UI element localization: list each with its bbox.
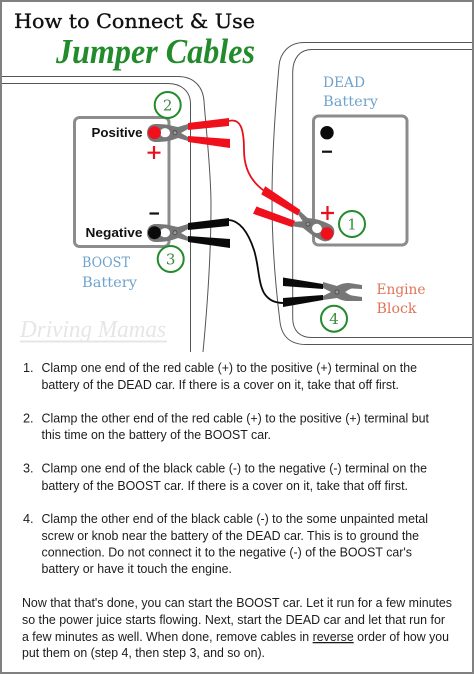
minus sign xyxy=(322,151,332,153)
step badge 4 xyxy=(321,306,347,332)
step 2 text: Clamp the other end of the red cable (+) to the positive (+) terminal but xyxy=(42,412,429,426)
step 3 text: 3. xyxy=(23,462,34,476)
step 3 text: Clamp one end of the black cable (-) to the negative (-) terminal on the xyxy=(42,462,427,476)
minus sign xyxy=(150,212,159,215)
label: boost battery: Battery xyxy=(82,275,137,291)
battery case xyxy=(314,116,407,245)
clamp 1: red on dead positive xyxy=(252,186,340,250)
heading: jumper cables: Jumper Cables xyxy=(55,32,255,71)
step badge 2: 2 xyxy=(163,96,172,114)
battery case xyxy=(74,118,169,246)
step 1 text: 1. xyxy=(23,361,34,375)
panel: boost battery xyxy=(74,118,169,291)
diagram: right car outline xyxy=(272,42,472,344)
label: dead battery: DEAD xyxy=(323,75,365,91)
step 2 text xyxy=(23,412,429,442)
black cable xyxy=(229,220,284,303)
step 1 text: Clamp one end of the red cable (+) to the positive (+) terminal on the xyxy=(42,361,417,375)
closing paragraph: Now that that's done, you can start the BOOST car. Let it run for a few minutes xyxy=(22,596,452,610)
step badge 2 xyxy=(155,92,181,118)
step badge 3 xyxy=(158,246,184,272)
step 4 text xyxy=(23,512,428,576)
label: negative: Negative xyxy=(86,225,142,240)
label: engine block: Block xyxy=(376,301,417,317)
closing paragraph: so the power juice starts flowing. Next, start the DEAD car and let that run for xyxy=(22,613,446,627)
step 3 text xyxy=(23,462,427,493)
watermark: Driving Mamas xyxy=(19,317,166,343)
step 2 text: 2. xyxy=(23,412,34,426)
step 1 text xyxy=(23,361,417,392)
step badge 1 xyxy=(339,211,365,237)
step 4 text: 4. xyxy=(23,512,34,526)
closing paragraph: put them on (step 4, then step 3, and so on). xyxy=(22,646,265,660)
clamp 4: black on engine block xyxy=(283,278,362,307)
plus sign xyxy=(321,206,334,220)
step 4 text: battery or have it touch the engine. xyxy=(42,562,232,576)
negative terminal xyxy=(320,126,334,139)
title xyxy=(14,9,255,71)
step 4 text: Clamp the other end of the black cable (-) to the some unpainted metal xyxy=(42,512,428,526)
step 4 text: connection. Do not connect it to the negative (-) of the BOOST car's xyxy=(42,546,412,560)
label: dead battery: Battery xyxy=(323,94,378,110)
step 1 text: battery of the DEAD car. If there is a cover on it, take that off first. xyxy=(42,378,399,392)
panel: dead battery xyxy=(314,75,407,245)
step 4 text: screw or knob near the battery of the DEAD car. This is to ground the xyxy=(42,529,419,543)
clamp 2: red on boost positive xyxy=(147,118,230,148)
step 3 text: battery of the BOOST car. If there is a cover on it, take that off first. xyxy=(42,479,408,493)
step badge 3: 3 xyxy=(166,250,175,268)
label: boost battery: BOOST xyxy=(82,255,131,271)
red cable xyxy=(229,120,266,192)
clamp 3: black on boost negative xyxy=(147,218,230,248)
closing paragraph xyxy=(22,596,452,660)
closing paragraph: a few minutes as well. When done, remove cables in reverse order of how you xyxy=(22,630,449,644)
label: engine block: Engine xyxy=(376,282,426,298)
heading: how to connect: How to Connect & Use xyxy=(14,9,255,33)
label: positive: Positive xyxy=(92,125,142,140)
diagram: left car outline xyxy=(2,76,211,352)
step badge 1: 1 xyxy=(347,216,357,234)
plus sign xyxy=(148,146,160,159)
step 2 text: this time on the battery of the BOOST car. xyxy=(42,428,271,442)
step badge 4: 4 xyxy=(329,310,339,328)
